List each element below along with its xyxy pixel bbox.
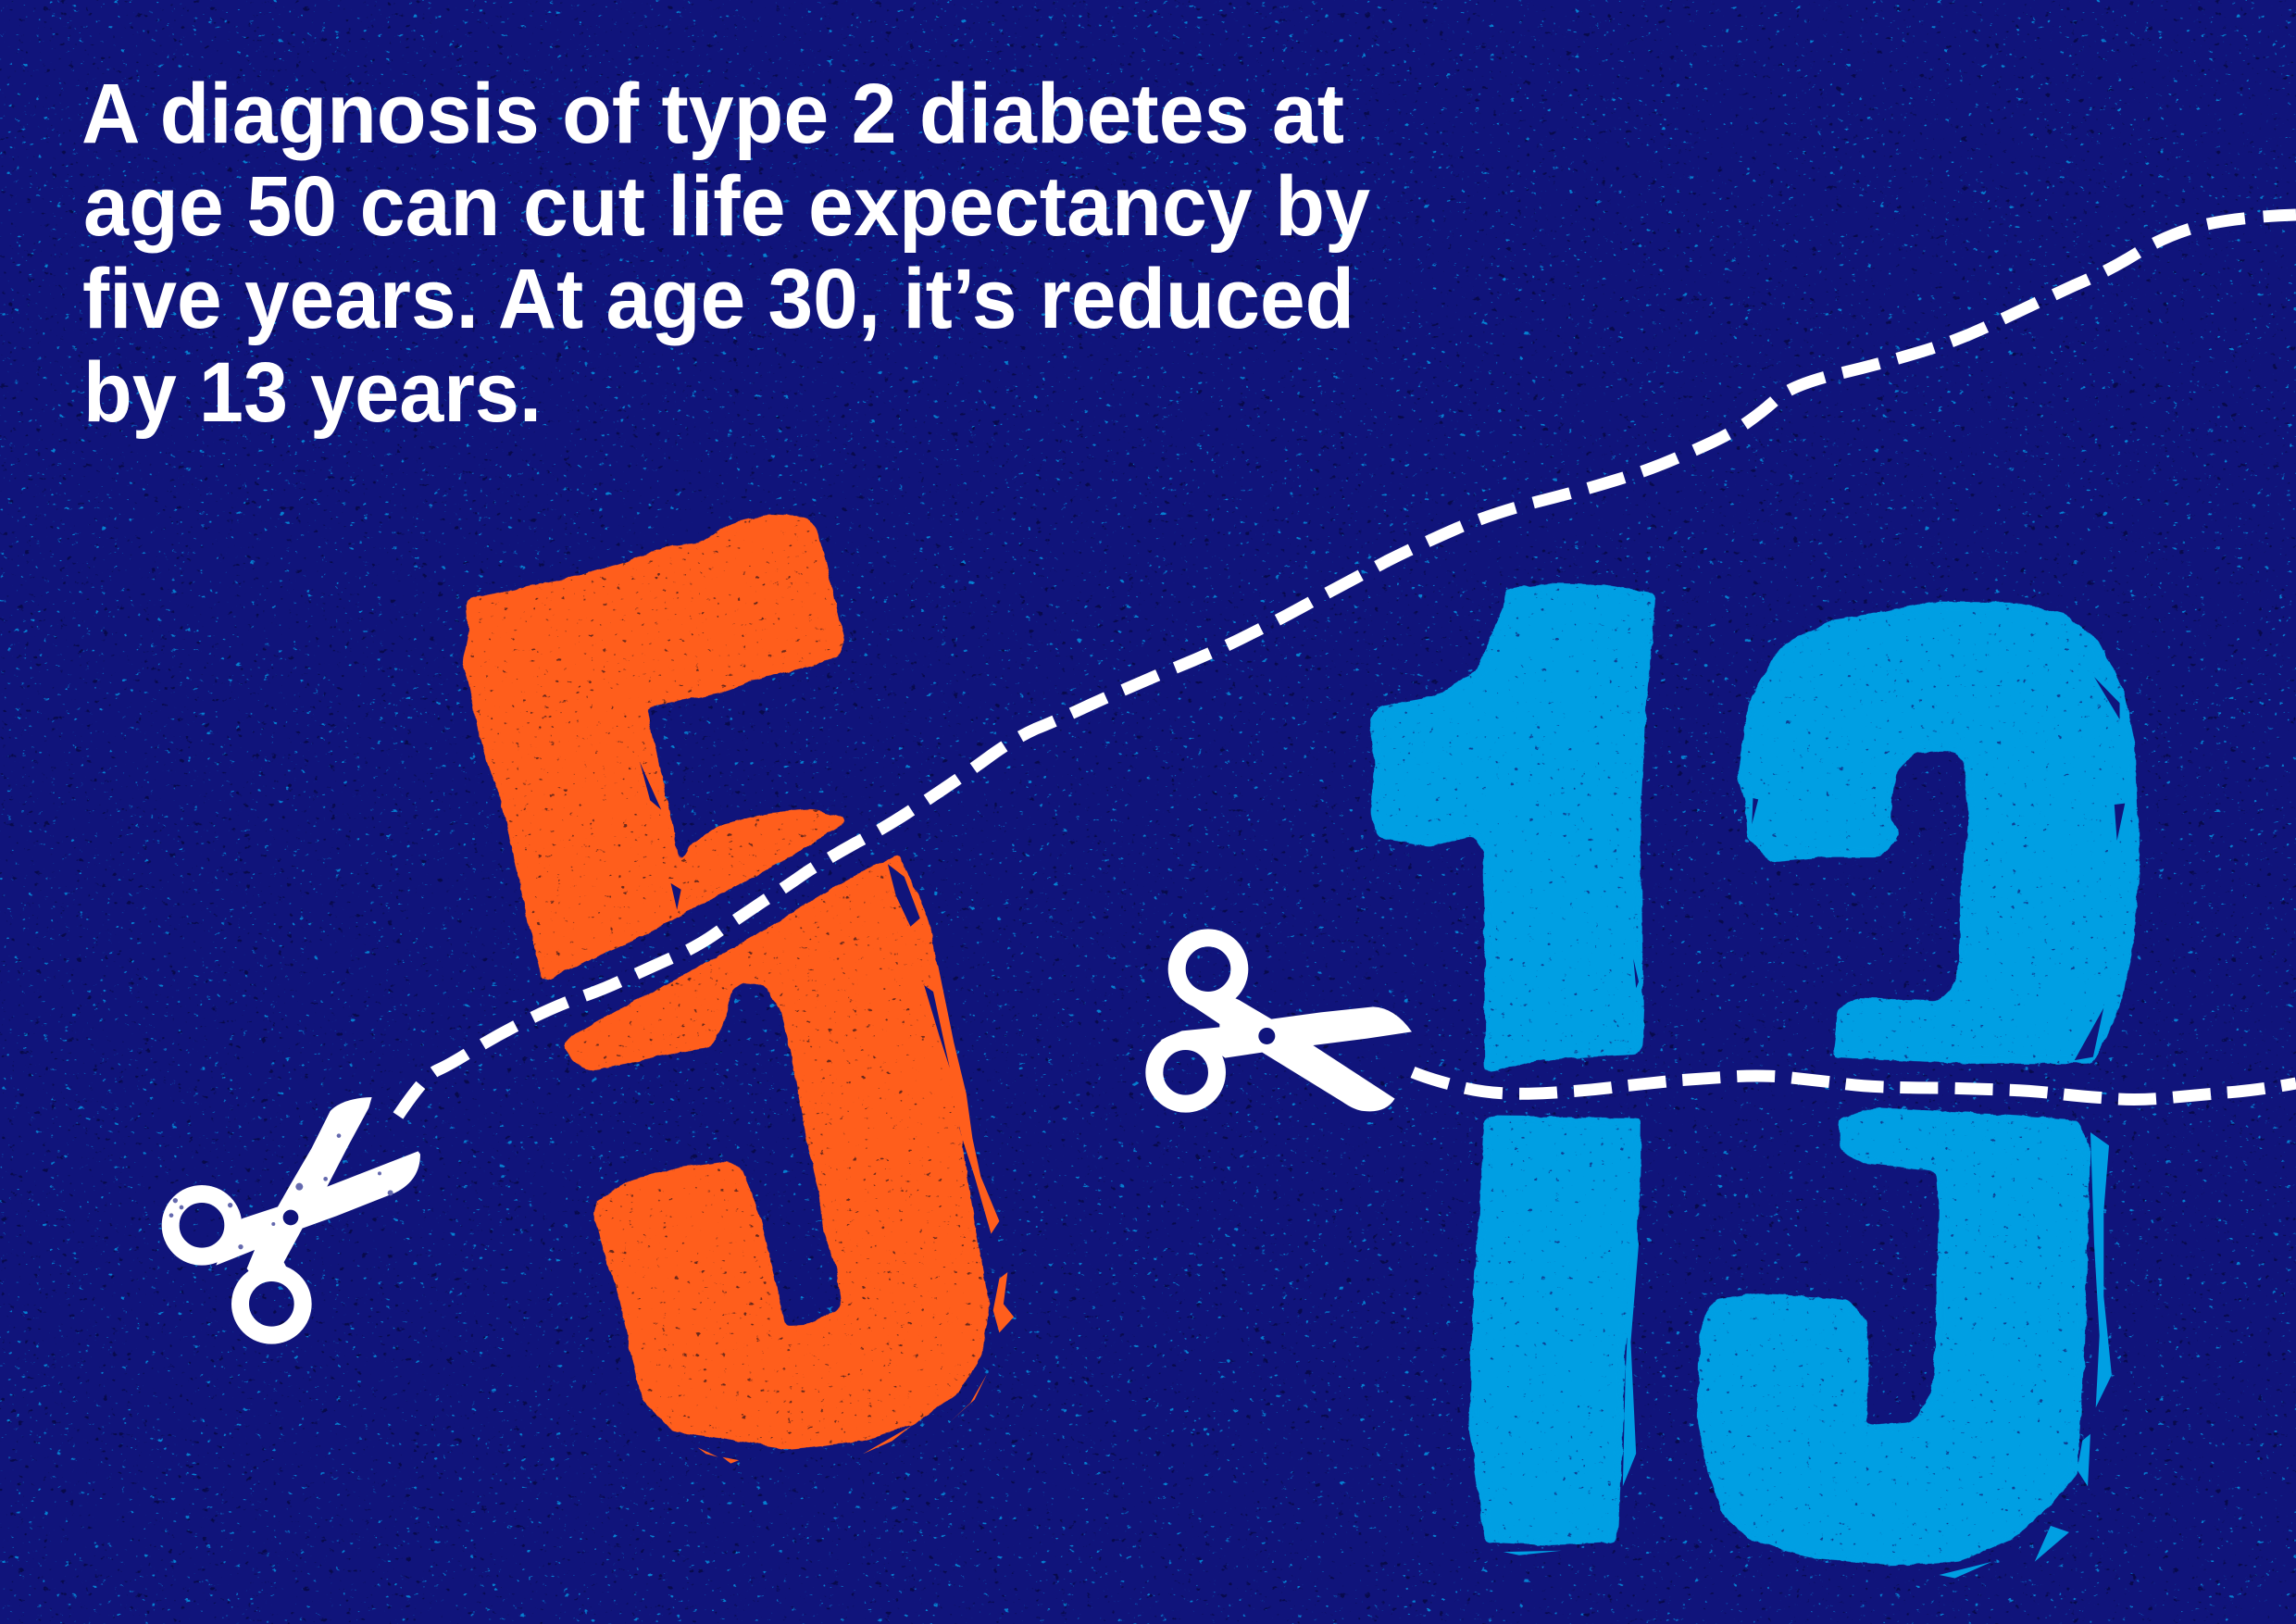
heading text	[81, 67, 1370, 440]
heading text: five years. At age 30, it’s reduced	[82, 252, 1354, 346]
heading text: A diagnosis of type 2 diabetes at	[81, 67, 1344, 161]
dashed cut line through 13	[1413, 1072, 2296, 1100]
number 5 in orange	[462, 515, 1014, 1464]
heading text: by 13 years.	[83, 345, 542, 440]
icon: scissors cutting through 5	[169, 1097, 420, 1335]
dashed cut line through 5	[398, 215, 2296, 1116]
heading text: age 50 can cut life expectancy by	[83, 159, 1370, 254]
icon: scissors cutting through 13	[1154, 938, 1412, 1111]
number 13 in blue	[1369, 583, 2140, 1578]
